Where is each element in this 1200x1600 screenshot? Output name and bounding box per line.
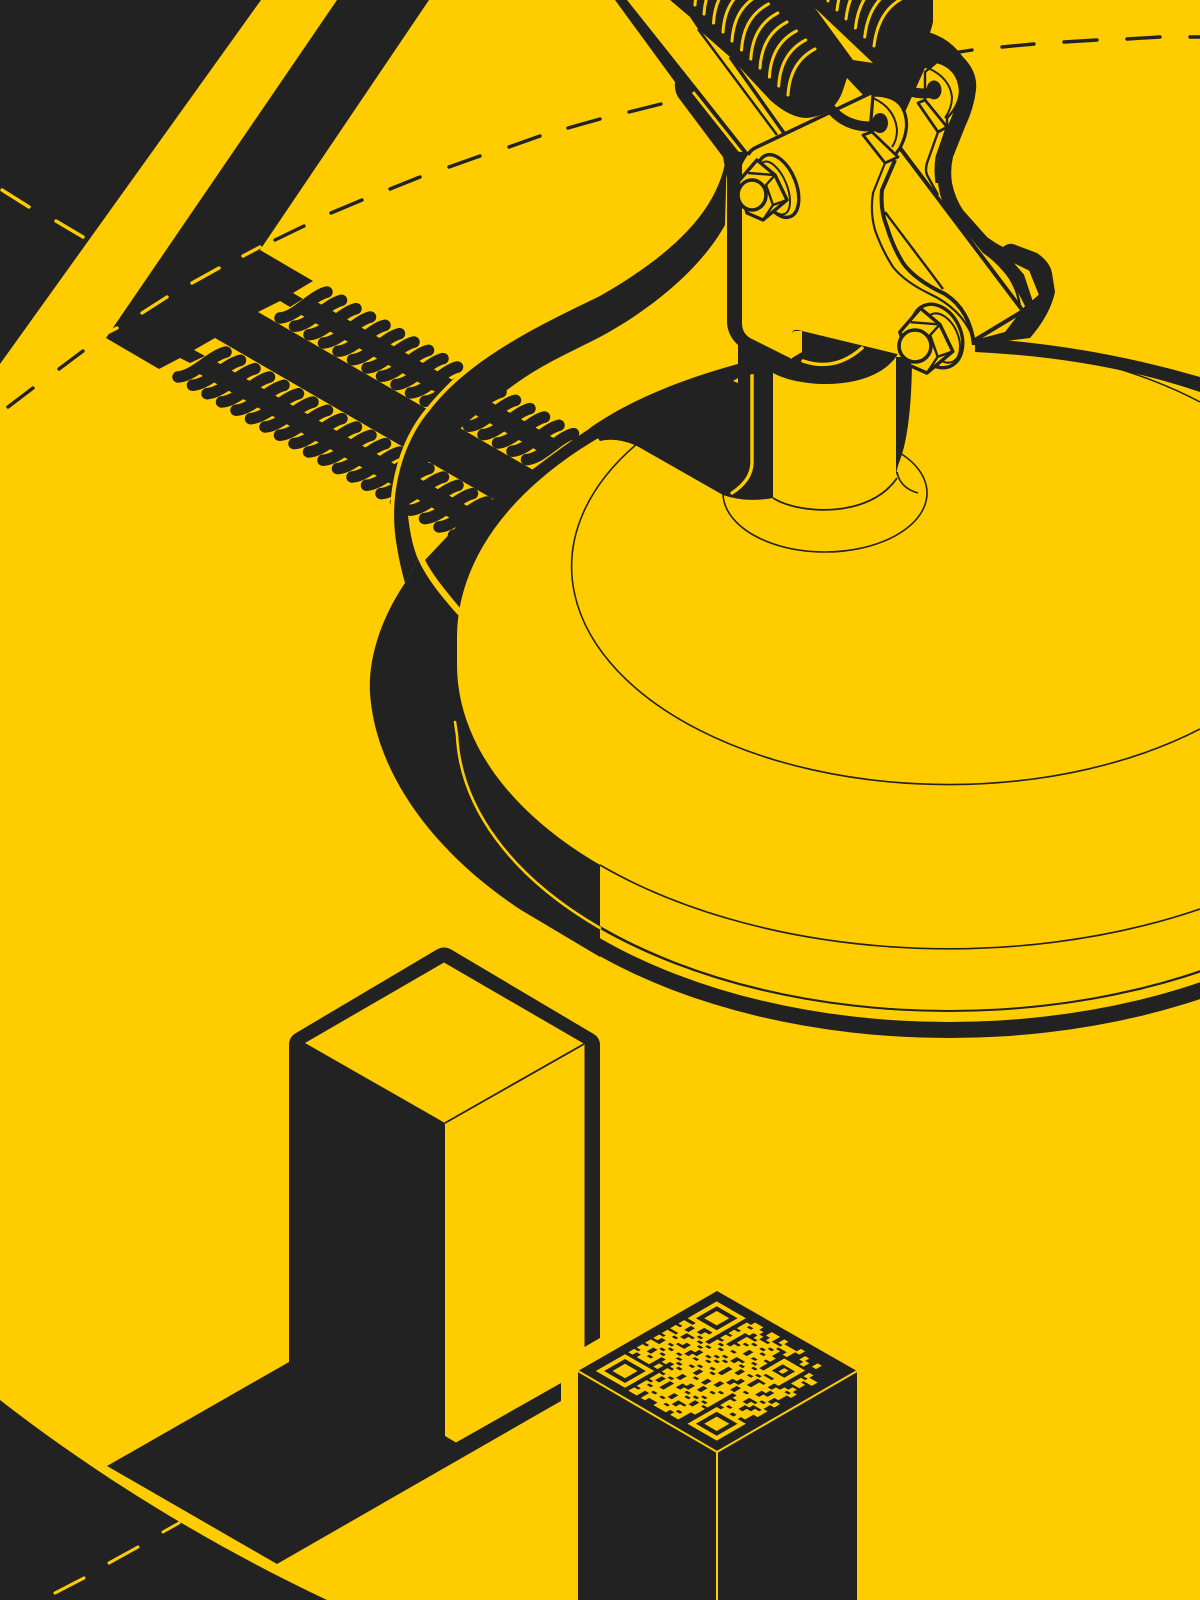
hose casing <box>394 362 480 547</box>
bolt one <box>738 149 807 223</box>
cylinder foot line <box>897 472 918 493</box>
hook lug two <box>925 62 960 127</box>
block outline and cast shadow <box>107 948 600 1564</box>
top-left dark corner <box>0 0 261 364</box>
second strap outer line <box>926 132 938 195</box>
upper coil spring <box>280 292 574 460</box>
strap diagonal line <box>885 212 943 289</box>
bracket top edge <box>748 91 875 155</box>
hook lug one inner arc <box>873 98 897 147</box>
diagonal band and strut <box>106 0 535 499</box>
QR finder patterns <box>600 1304 833 1438</box>
pillar shadow <box>590 340 773 500</box>
right hose behind bracket <box>880 30 1055 345</box>
collar yellow arc <box>803 348 862 364</box>
disc shadow band <box>425 364 800 700</box>
pillar yellow tick <box>733 378 738 383</box>
bolt two <box>899 296 972 376</box>
hook lug one <box>870 95 907 155</box>
QR block body <box>578 1291 857 1600</box>
disc bottom rim <box>449 462 1200 1038</box>
large isometric block <box>107 948 600 1564</box>
lug tab two <box>918 100 947 132</box>
curved hose <box>394 150 727 583</box>
hook lug two inner arc <box>928 68 952 118</box>
QR block edges <box>578 1371 857 1600</box>
lower coil spring <box>178 352 502 535</box>
pillar and base <box>590 340 927 552</box>
dashed centre line lower left <box>55 1523 179 1593</box>
pillar yellow highlight <box>732 354 752 493</box>
strap outer line <box>872 163 972 335</box>
collar tab <box>792 331 802 358</box>
hook wire one <box>830 108 885 127</box>
bracket slope edge <box>900 148 1023 340</box>
disc yellow edge line <box>455 722 600 928</box>
hook wire two <box>897 85 937 93</box>
hook hole two <box>926 80 942 100</box>
QR block <box>578 1291 857 1600</box>
bracket dark outline <box>727 150 900 384</box>
strap inner line <box>882 160 974 345</box>
spring hooks <box>830 62 960 163</box>
disc inner ring <box>572 443 1200 785</box>
cylinder bottom edge <box>773 478 897 510</box>
disc top right rim <box>975 338 1200 392</box>
second strap inner line <box>936 128 947 183</box>
right bracket plate <box>897 68 1040 340</box>
bottom-left dark corner <box>0 1400 327 1600</box>
left arm strip <box>615 0 784 178</box>
hook hole one <box>872 113 888 133</box>
disc lower layers <box>600 866 1200 1022</box>
top coil springs <box>670 0 933 118</box>
disc outer thin arc <box>600 865 1200 949</box>
QR code <box>598 1303 836 1439</box>
main bracket <box>727 91 1023 384</box>
cylinder right shade <box>896 357 912 478</box>
base ring <box>723 453 927 552</box>
disc top surface <box>457 353 1200 949</box>
block top edge <box>445 1044 584 1123</box>
bracket body <box>742 100 1023 359</box>
disc rim thin line <box>1095 362 1200 402</box>
QR data modules <box>598 1303 836 1439</box>
dashed centre line upper left <box>2 37 1200 407</box>
disc assembly <box>449 338 1200 1038</box>
lug tab one <box>863 132 898 163</box>
cast shadow crescent <box>370 559 700 957</box>
QR finder centres <box>612 1311 821 1431</box>
